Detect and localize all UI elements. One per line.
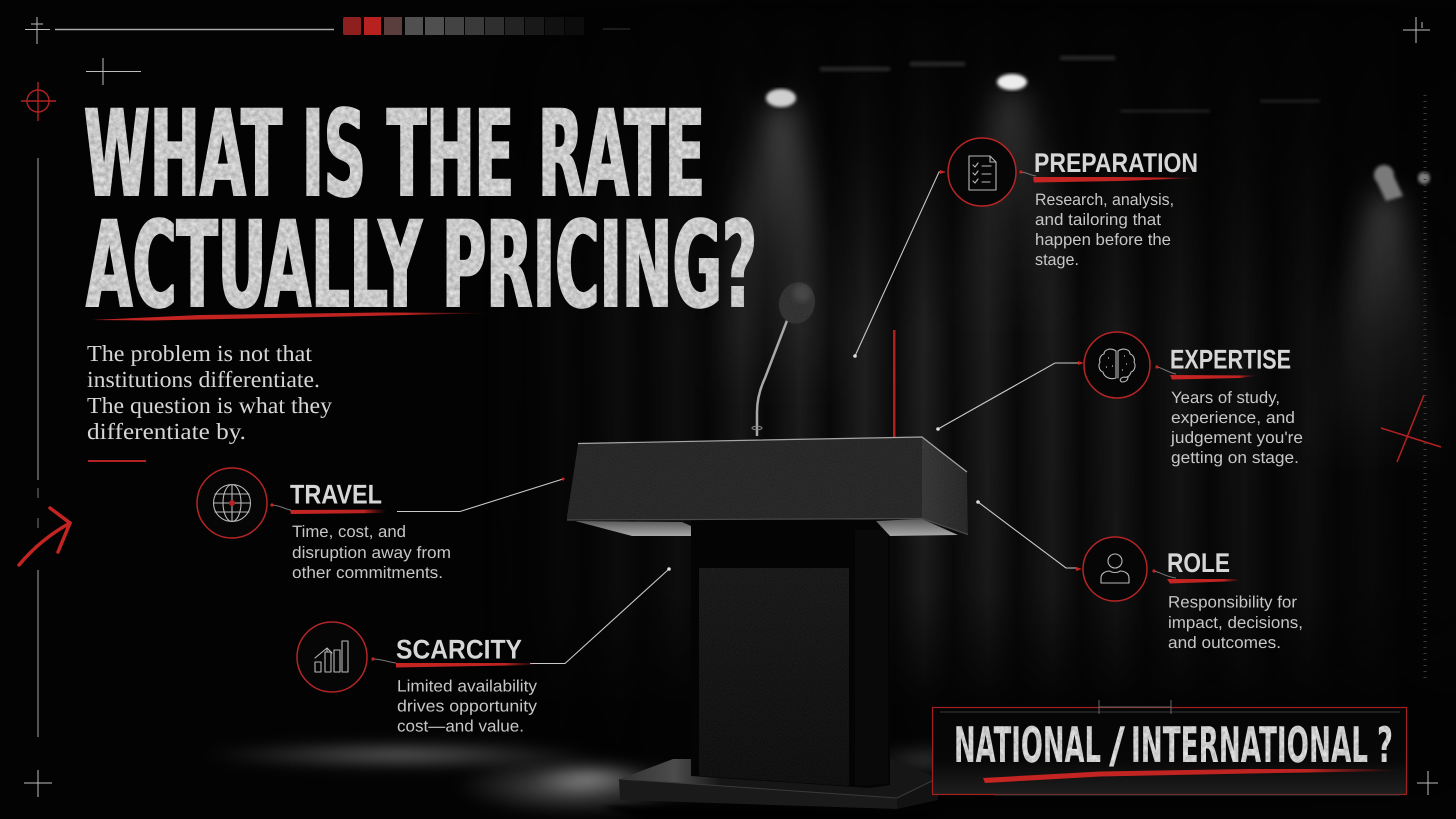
intro text: The problem is not that bbox=[87, 341, 313, 366]
icon: red cross mark bbox=[1381, 395, 1441, 462]
red vertical accent line bbox=[893, 330, 896, 437]
podium top bbox=[567, 437, 968, 534]
top scale bar bbox=[25, 17, 630, 44]
description: scarcity: cost—and value. bbox=[397, 718, 524, 736]
icon: red crosshair bbox=[21, 82, 56, 121]
icon: globe bbox=[197, 468, 267, 538]
description: expertise: getting on stage. bbox=[1171, 449, 1299, 467]
intro accent rule bbox=[88, 460, 146, 462]
description: scarcity: Limited availability bbox=[397, 678, 538, 696]
icon: brain bbox=[1084, 332, 1150, 398]
panel: role bbox=[1083, 537, 1303, 652]
title bbox=[84, 84, 757, 336]
callout text: ? bbox=[1377, 717, 1393, 774]
heading: travel: TRAVEL bbox=[290, 480, 382, 510]
heading: role: ROLE bbox=[1167, 548, 1230, 578]
background bbox=[612, 152, 1319, 669]
title: WHAT bbox=[84, 84, 282, 225]
underline: role bbox=[1152, 569, 1240, 584]
description: role: impact, decisions, bbox=[1168, 614, 1303, 632]
panel: scarcity bbox=[297, 622, 538, 736]
panel: expertise bbox=[1084, 332, 1303, 467]
panel: travel bbox=[197, 468, 451, 582]
description: travel: disruption away from bbox=[292, 544, 451, 562]
connector: role bbox=[976, 500, 1082, 571]
description: expertise: Years of study, bbox=[1171, 389, 1280, 407]
floor glow bbox=[200, 740, 985, 816]
description: scarcity bbox=[397, 678, 538, 736]
connector: preparation bbox=[853, 170, 946, 358]
icon: person bbox=[1083, 537, 1147, 601]
callout underline bbox=[983, 769, 1400, 783]
underline: travel bbox=[270, 503, 385, 514]
microphone bbox=[752, 278, 820, 436]
description: preparation: stage. bbox=[1035, 251, 1079, 269]
description: expertise: experience, and bbox=[1171, 409, 1295, 427]
callout frame bbox=[932, 700, 1406, 795]
description: role bbox=[1168, 594, 1303, 652]
description: travel: Time, cost, and bbox=[292, 523, 406, 541]
description: preparation: and tailoring that bbox=[1035, 211, 1161, 229]
connector: expertise bbox=[936, 361, 1084, 431]
description: preparation: Research, analysis, bbox=[1035, 191, 1174, 209]
icon: red arrow bbox=[19, 508, 70, 565]
title underline bbox=[92, 312, 495, 320]
callout text: / bbox=[1109, 717, 1125, 774]
description: preparation: happen before the bbox=[1035, 231, 1171, 249]
callout text bbox=[954, 717, 1393, 774]
callout text: NATIONAL bbox=[954, 717, 1101, 774]
description: expertise bbox=[1170, 389, 1303, 467]
callout: national / international bbox=[932, 700, 1406, 795]
description: role: Responsibility for bbox=[1168, 594, 1298, 612]
title: RATE bbox=[538, 84, 705, 225]
heading: scarcity: SCARCITY bbox=[396, 634, 522, 664]
title: ACTUALLY bbox=[86, 195, 423, 336]
icon: bar chart bbox=[297, 622, 367, 692]
description: travel: other commitments. bbox=[292, 564, 443, 582]
podium base bbox=[600, 759, 950, 819]
title: THE bbox=[387, 84, 514, 225]
podium bbox=[567, 437, 968, 819]
infographic stage: PRICING? bbox=[442, 195, 757, 336]
intro text: The question is what they bbox=[87, 393, 333, 418]
underline: scarcity bbox=[371, 657, 536, 668]
intro text bbox=[87, 341, 333, 444]
intro text: differentiate by. bbox=[87, 419, 246, 444]
icon: checklist bbox=[948, 138, 1016, 206]
description: preparation bbox=[1035, 191, 1174, 269]
description: scarcity: drives opportunity bbox=[397, 698, 538, 716]
panel: preparation bbox=[948, 138, 1200, 269]
heading: expertise: EXPERTISE bbox=[1170, 344, 1291, 374]
intro text: institutions differentiate. bbox=[87, 367, 320, 392]
podium underside bbox=[575, 519, 958, 536]
title: IS bbox=[302, 84, 366, 225]
description: expertise: judgement you're bbox=[1170, 429, 1303, 447]
heading: preparation: PREPARATION bbox=[1034, 148, 1198, 178]
underline: expertise bbox=[1155, 365, 1258, 380]
connector: scarcity bbox=[530, 567, 671, 664]
connector: travel bbox=[397, 478, 564, 512]
description: role: and outcomes. bbox=[1168, 634, 1281, 652]
podium column bbox=[691, 520, 890, 788]
stage lights bbox=[705, 56, 1450, 480]
description: travel bbox=[292, 523, 451, 582]
underline: preparation bbox=[1019, 170, 1200, 182]
